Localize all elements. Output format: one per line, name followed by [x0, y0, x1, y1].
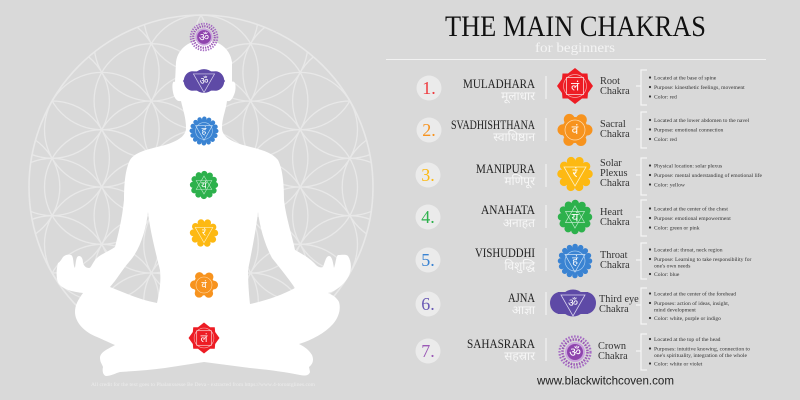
body chakra: heart [193, 174, 215, 196]
icon: third eye chakra: ॐ [568, 296, 578, 310]
details crown: one's spirituality, integration of the whole [654, 352, 747, 359]
body chakra: crown [191, 24, 217, 50]
row 4: anahata [416, 200, 731, 236]
icon: root chakra: लं [571, 80, 580, 94]
flower of life background [28, 14, 374, 306]
details throat: Color: blue [654, 272, 680, 278]
name sahasrara [467, 336, 536, 363]
icon: root chakra [557, 68, 593, 104]
details solar plexus: Purpose: mental understanding of emotional life [654, 172, 762, 179]
body chakra: solar plexus [193, 222, 215, 244]
number 4: 4. [421, 207, 435, 227]
row 1: muladhara [416, 68, 745, 105]
number 4 [416, 204, 440, 230]
details throat: Located at: throat, neck region [654, 248, 723, 254]
details heart: Color: green or pink [654, 226, 700, 232]
body chakra: crown: ॐ [199, 31, 209, 44]
label root chakra: Root [600, 76, 620, 87]
name anahata [481, 202, 536, 230]
name vishuddhi [475, 245, 535, 274]
label solar plexus chakra: Solar [600, 158, 622, 169]
label sacral chakra: Chakra [600, 129, 630, 140]
icon: sacral chakra: वं [572, 123, 579, 137]
credit line: All credit for the text goes to Phalanxsesse Be Deva - extracted from https://www.4-torontglines.com [91, 381, 315, 388]
name ajna: AJNA [508, 290, 535, 305]
body chakra: heart: यं [201, 180, 207, 192]
row 5: vishuddhi [416, 243, 752, 279]
icon: crown chakra [560, 336, 590, 368]
details heart [649, 206, 731, 232]
number 3: 3. [421, 165, 435, 185]
name manipura [476, 161, 536, 189]
icon: heart chakra: यं [572, 210, 580, 224]
label crown chakra: Chakra [598, 351, 628, 362]
number 6: 6. [421, 294, 435, 314]
label third eye chakra: Chakra [599, 304, 629, 315]
label throat chakra: Throat [600, 250, 628, 261]
body chakra: third eye [183, 69, 225, 93]
details solar plexus: Physical location: solar plexus [654, 164, 722, 170]
name muladhara: मूलाधार [501, 89, 536, 104]
body chakra: throat [192, 119, 216, 143]
icon: throat chakra: हं [572, 254, 578, 268]
label crown chakra: Crown [598, 341, 626, 352]
name vishuddhi: विशुद्धि [504, 258, 535, 274]
row 7: sahasrara [416, 334, 750, 370]
icon: solar plexus chakra [562, 160, 588, 188]
name ajna: आज्ञा [512, 303, 536, 317]
details heart: Purpose: emotional empowerment [654, 216, 731, 222]
details heart: Located at the center of the chest [654, 206, 728, 212]
body chakra: root: लं [200, 332, 208, 345]
label solar plexus chakra: Chakra [600, 178, 630, 189]
details sacral [649, 118, 750, 143]
icon: sacral chakra [562, 117, 588, 143]
name vishuddhi: VISHUDDHI [475, 245, 535, 260]
icon: heart chakra [562, 204, 588, 230]
body chakra: root [189, 323, 219, 353]
label root chakra: Chakra [600, 86, 630, 97]
icon: throat chakra [560, 246, 590, 276]
number 1: 1. [422, 78, 436, 98]
number 5 [416, 248, 440, 272]
number 7 [416, 338, 440, 364]
details root: Color: red [654, 94, 677, 100]
details third eye: Located at the center of the forehead [654, 290, 736, 298]
name sahasrara: SAHASRARA [467, 336, 536, 351]
label solar plexus chakra: Plexus [600, 168, 627, 179]
number 3 [416, 162, 440, 188]
icon: third eye chakra [550, 290, 596, 316]
name svadhishthana: स्वाधिष्ठान [493, 129, 535, 144]
name svadhishthana [451, 117, 535, 144]
name manipura: मणिपूर [504, 173, 536, 189]
name sahasrara: सहस्रार [504, 349, 536, 363]
details third eye [649, 290, 736, 322]
label throat chakra: Chakra [600, 260, 630, 271]
details solar plexus [649, 164, 762, 188]
details third eye: mind development [654, 308, 696, 314]
label heart chakra: Chakra [600, 217, 630, 228]
body chakra: sacral: वं [201, 279, 207, 291]
details throat [649, 248, 752, 278]
subtitle: for beginners [535, 41, 615, 56]
body chakra: throat: हं [202, 125, 208, 136]
name muladhara: MULADHARA [463, 76, 536, 91]
label sacral chakra: Sacral [600, 119, 626, 130]
details solar plexus: Color: yellow [654, 182, 686, 188]
label heart chakra: Heart [600, 207, 623, 218]
details crown: Color: white or violet [654, 362, 703, 368]
details root: Purpose: kinesthetic feelings, movement [654, 84, 745, 91]
row 3: manipura [416, 158, 762, 195]
details third eye: Color: white, purple or indigo [654, 316, 721, 322]
details sacral: Located at the lower abdomen to the navel [654, 118, 750, 124]
name muladhara [463, 76, 536, 104]
icon: solar plexus chakra: रं [573, 166, 579, 180]
details sacral: Color: red [654, 137, 677, 143]
details crown: Purposes: intuitive knowing, connection to [654, 346, 750, 352]
number 7: 7. [421, 341, 435, 361]
row 6: ajna [416, 288, 736, 324]
details crown [649, 336, 750, 368]
name svadhishthana: SVADHISHTHANA [451, 117, 535, 132]
website url: www.blackwitchcoven.com [536, 374, 674, 388]
name anahata: ANAHATA [481, 202, 536, 217]
body chakra: third eye: ॐ [200, 76, 209, 87]
body chakra: sacral [194, 275, 214, 295]
number 1 [416, 76, 442, 100]
details crown: Located at the top of the head [654, 336, 721, 343]
name manipura: MANIPURA [476, 161, 536, 176]
row 2: svadhishthana [416, 112, 750, 148]
icon: crown chakra: ॐ [569, 344, 581, 360]
details throat: one's own needs [654, 264, 690, 270]
number 2: 2. [422, 120, 436, 140]
name ajna [508, 290, 536, 317]
name anahata: अनाहत [503, 216, 536, 230]
details throat: Purpose: Learning to take responsibility for [654, 256, 752, 263]
details root [649, 74, 745, 100]
title: THE MAIN CHAKRAS [445, 10, 706, 43]
body chakra: solar plexus: रं [202, 226, 207, 238]
label third eye chakra: Third eye [599, 294, 639, 305]
details sacral: Purpose: emotional connection [654, 128, 723, 134]
details third eye: Purposes: action of ideas, insight, [654, 300, 730, 307]
number 5: 5. [421, 250, 435, 270]
details root: Located at the base of spine [654, 74, 717, 82]
number 2 [416, 118, 442, 142]
meditating body silhouette [57, 40, 351, 376]
number 6 [416, 292, 440, 316]
